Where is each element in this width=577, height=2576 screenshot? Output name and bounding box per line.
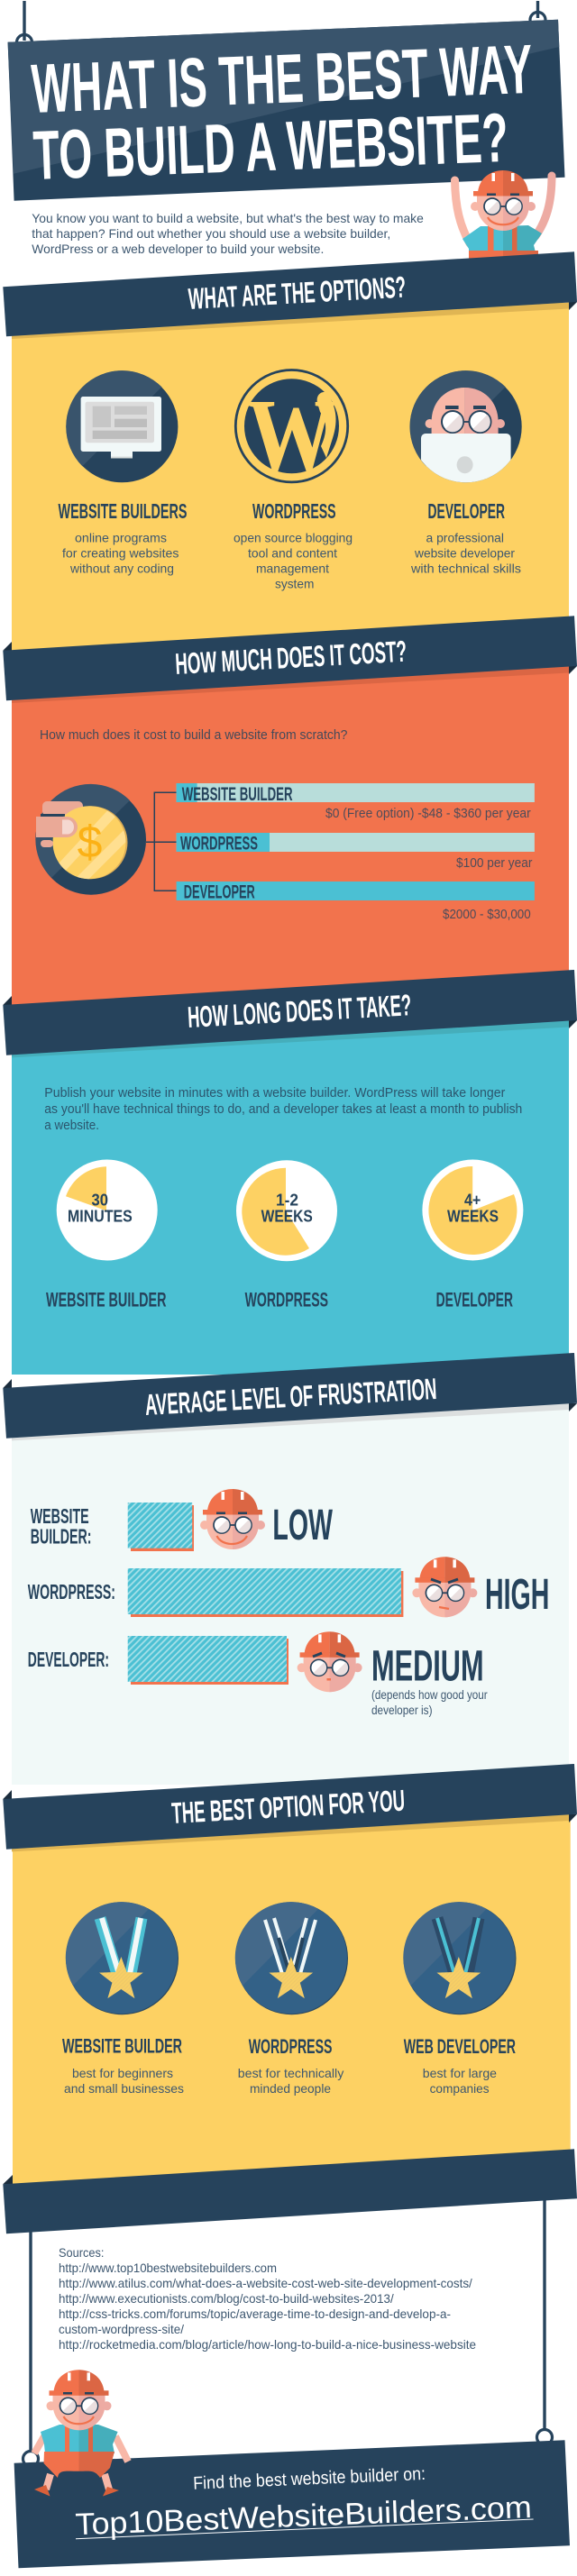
bar: wordpress cost: WORDPRESS — [180, 834, 258, 854]
sources: http://www.atilus.com/what-does-a-website-cost-web-site-development-costs/ — [59, 2276, 472, 2290]
ribbon: the best option for you: THE BEST OPTION FOR YOU — [170, 1784, 406, 1830]
pie: developer 4+ weeks — [422, 1159, 523, 1311]
sources: http://www.executionists.com/blog/cost-to-build-websites-2013/ — [59, 2291, 394, 2306]
hanger: bottom rods and rings — [23, 2196, 552, 2466]
bar: developer cost — [177, 882, 535, 922]
option: website builder medal — [62, 1902, 184, 2096]
option: wordpress medal: WORDPRESS — [249, 2035, 332, 2058]
panel: time background — [12, 1019, 569, 1375]
option: web developer medal: companies — [430, 2081, 490, 2096]
sources: http://css-tricks.com/forums/topic/average-time-to-design-and-develop-a- — [59, 2307, 451, 2321]
time intro text: Publish your website in minutes with a website builder. WordPress will take longer — [44, 1085, 505, 1101]
sources: custom-wordpress-site/ — [59, 2322, 184, 2336]
option: wordpress medal — [235, 1902, 348, 2096]
ribbon: what are the options — [3, 251, 577, 339]
hanger: top right — [530, 1, 545, 27]
title banner — [8, 20, 565, 201]
connector lines — [146, 792, 177, 891]
pie: developer 4+ weeks: WEEKS — [447, 1208, 499, 1226]
pie: wordpress 1-2 weeks — [236, 1160, 337, 1311]
panel: cost background — [12, 663, 569, 1009]
ribbon: how long does it take — [3, 970, 577, 1057]
time intro text: as you'll have technical things to do, and a developer takes at least a month to publish — [44, 1101, 522, 1117]
sources: http://www.top10bestwebsitebuilders.com — [59, 2261, 277, 2275]
bar: website builder cost — [177, 783, 535, 821]
frustration row: website builder: WEBSITE — [31, 1504, 89, 1528]
ribbon: how much does it cost: HOW MUCH DOES IT COST? — [174, 635, 408, 681]
bar: wordpress cost: $100 per year — [456, 855, 532, 871]
option: website builders — [58, 370, 188, 576]
pie: developer 4+ weeks: 4+ — [464, 1192, 481, 1210]
bar: developer cost: $2000 - $30,000 — [443, 907, 531, 922]
sources — [59, 2245, 476, 2352]
icon: medal navy teal — [403, 1902, 516, 2014]
option: website builder medal: WEBSITE BUILDER — [62, 2035, 182, 2058]
shirt — [463, 226, 503, 263]
ribbon: how much does it cost — [3, 616, 577, 703]
option: developer: a professional — [426, 531, 504, 545]
ribbon: how long does it take: HOW LONG DOES IT TAKE? — [187, 988, 412, 1034]
frustration row: wordpress — [28, 1557, 549, 1619]
pie: developer 4+ weeks: DEVELOPER — [436, 1288, 513, 1311]
option: website builders: online programs — [75, 531, 167, 545]
frustration row: website builder — [31, 1489, 333, 1551]
icon: medal white navy — [235, 1902, 348, 2014]
bar: developer cost: DEVELOPER — [184, 882, 255, 903]
frustration row: developer: DEVELOPER: — [28, 1648, 109, 1671]
option: wordpress medal: minded people — [250, 2081, 331, 2096]
icon: monitor — [66, 370, 178, 482]
arms — [454, 176, 552, 243]
option: wordpress: tool and content — [248, 546, 337, 561]
option: wordpress — [234, 370, 353, 591]
intro text: that happen? Find out whether you should use a website builder, — [32, 226, 390, 241]
frustration row: developer: (depends how good your — [371, 1688, 488, 1702]
intro text — [32, 211, 424, 256]
footer: link underline — [76, 2519, 534, 2539]
icon: hand holding coin — [35, 784, 146, 895]
option: website builders: without any coding — [69, 562, 174, 576]
option: developer — [410, 370, 522, 576]
option: developer: with technical skills — [410, 562, 521, 576]
option: web developer medal: WEB DEVELOPER — [404, 2035, 516, 2058]
option: web developer medal: best for large — [423, 2066, 497, 2080]
icon: medal teal white — [66, 1902, 179, 2014]
ribbon: what are the options: WHAT ARE THE OPTIONS? — [188, 270, 407, 315]
frustration row: website builder: BUILDER: — [31, 1525, 92, 1548]
pie: wordpress 1-2 weeks: WORDPRESS — [245, 1288, 328, 1311]
panel: frustration background — [12, 1402, 569, 1785]
arms — [34, 2436, 128, 2462]
time intro text — [44, 1085, 522, 1133]
option: developer: website developer — [414, 546, 515, 561]
shorts — [43, 2452, 79, 2478]
ribbon: average level of frustration — [3, 1353, 577, 1440]
intro text: You know you want to build a website, but what's the best way to make — [32, 211, 424, 225]
pie: website builder 30 minutes: MINUTES — [68, 1208, 133, 1226]
pants — [469, 251, 503, 263]
panel: best option background — [13, 1812, 571, 2190]
pie: wordpress 1-2 weeks: WEEKS — [261, 1208, 313, 1226]
bar: wordpress cost — [177, 833, 535, 871]
hanger: top left — [16, 1, 32, 50]
ribbon: the best option for you — [3, 1764, 577, 1851]
shirt — [41, 2425, 79, 2453]
pie: wordpress 1-2 weeks: 1-2 — [276, 1192, 298, 1210]
frustration row: website builder: LOW — [272, 1502, 333, 1549]
time intro text: a website. — [44, 1118, 99, 1133]
face: unsure — [298, 1631, 362, 1692]
option: wordpress: open source blogging — [234, 531, 353, 545]
icon: hand holding coin: $ — [78, 817, 102, 867]
option: website builders: for creating websites — [62, 546, 179, 561]
mascot: sitting on footer — [34, 2370, 128, 2497]
footer: website link: Top10BestWebsiteBuilders.com — [75, 2490, 532, 2542]
pie: website builder 30 minutes: 30 — [92, 1192, 108, 1210]
option: wordpress: system — [275, 577, 314, 591]
frustration row: developer: developer is) — [371, 1704, 433, 1717]
option: website builder medal: best for beginners — [72, 2066, 173, 2080]
sources: http://rocketmedia.com/blog/article/how-long-to-build-a-nice-business-website — [59, 2337, 476, 2352]
option: website builders: WEBSITE BUILDERS — [58, 499, 188, 523]
pie: website builder 30 minutes: WEBSITE BUILDER — [46, 1288, 167, 1311]
footer: call to action: Find the best website builder on: — [193, 2464, 426, 2494]
option: web developer medal — [403, 1902, 516, 2096]
ribbon: blank closing — [3, 2149, 577, 2233]
frustration row: developer: MEDIUM — [371, 1642, 484, 1690]
cost intro text: How much does it cost to build a website from scratch? — [40, 727, 347, 743]
intro text: WordPress or a web developer to build your website. — [32, 242, 324, 256]
face: happy — [200, 1489, 265, 1549]
shoes — [34, 2485, 50, 2497]
panel: what are the options background — [12, 303, 569, 662]
sources: Sources: — [59, 2245, 104, 2260]
option: developer: DEVELOPER — [427, 499, 505, 523]
icon: wordpress logo: W — [247, 379, 335, 494]
legs — [46, 2474, 109, 2489]
bar: website builder cost: $0 (Free option) -$48 - $360 per year — [325, 806, 531, 821]
icon: developer behind laptop — [409, 370, 522, 483]
face: angry — [412, 1557, 477, 1617]
option: wordpress medal: best for technically — [238, 2066, 343, 2080]
frustration row: developer — [28, 1631, 488, 1717]
bar: website builder cost: WEBSITE BUILDER — [182, 784, 293, 805]
option: website builder medal: and small businesses — [64, 2081, 184, 2096]
option: wordpress: management — [256, 562, 329, 576]
option: wordpress: WORDPRESS — [252, 499, 336, 523]
pie: website builder 30 minutes — [46, 1159, 167, 1311]
mascot: top, arms raised — [454, 170, 552, 263]
footer banner — [14, 2440, 570, 2568]
frustration row: wordpress: WORDPRESS: — [28, 1580, 115, 1603]
